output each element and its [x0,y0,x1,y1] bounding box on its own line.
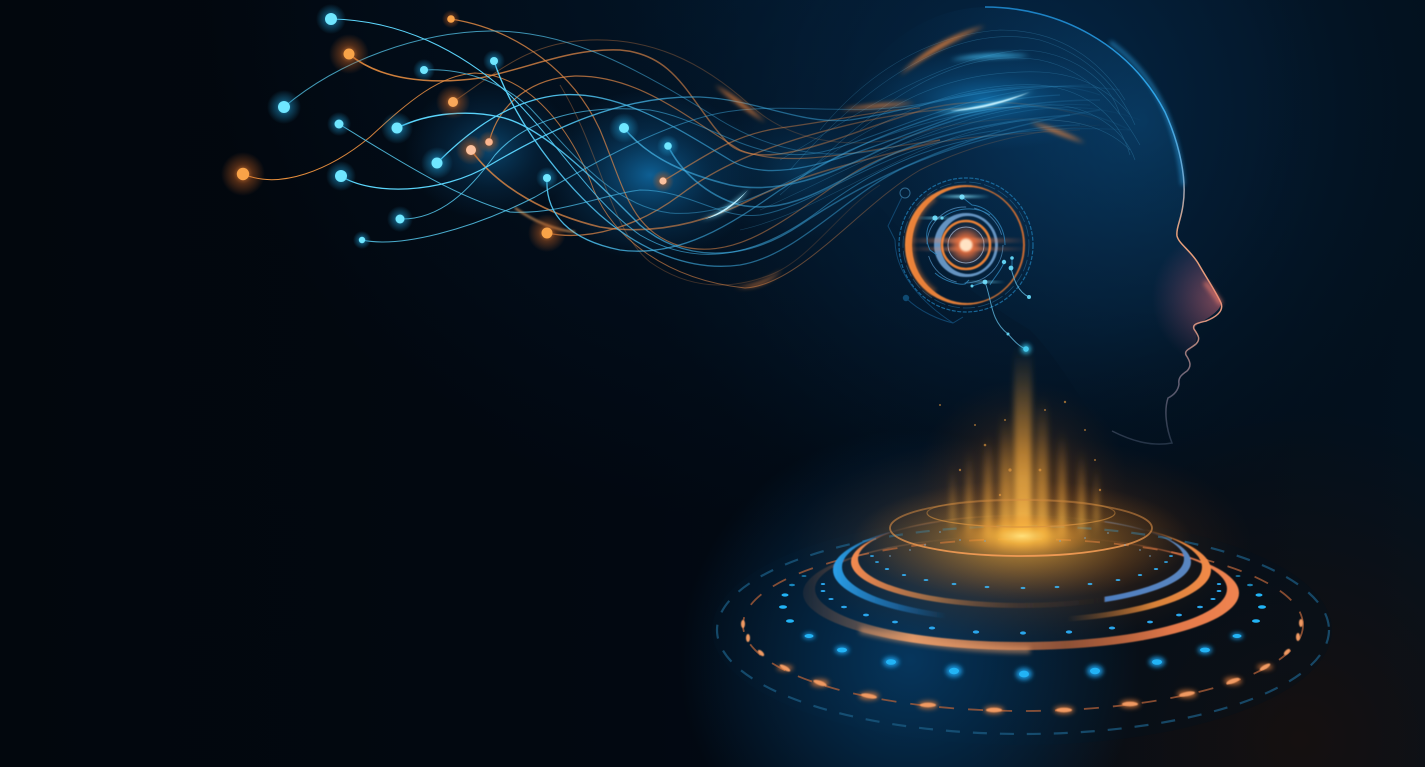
lens flare [905,238,1027,243]
top floating ellipses [890,499,1152,556]
small blue dots [821,555,1221,635]
inner rings [927,207,1003,283]
ring soft highlight [860,630,1030,650]
middle ring [833,516,1211,623]
rings with crescent thickness [803,515,1239,650]
outer orange ring [803,536,1239,650]
sparks [939,401,1101,496]
faint dots around top ellipse [889,531,1151,557]
orange strands [243,19,1100,288]
orange ring [905,185,1025,305]
light beam [917,350,1127,580]
data nodes: cyan [267,4,679,249]
head silhouette [846,7,1222,444]
circuit nodes [903,295,909,301]
inner ring [851,515,1191,608]
large blue dots [779,575,1266,680]
cyan strands [284,19,1140,266]
hair highlights [515,26,1085,287]
data nodes: orange [221,10,674,252]
circuit lines [888,188,1029,349]
platform core glow [852,480,1192,600]
orange glowing ring segments [741,619,1303,714]
glows behind strands [405,50,1120,260]
ear: circular tech emblem [888,178,1033,354]
hair strands: fine fan near head [740,30,1140,230]
outer dashed rings [717,526,1329,734]
